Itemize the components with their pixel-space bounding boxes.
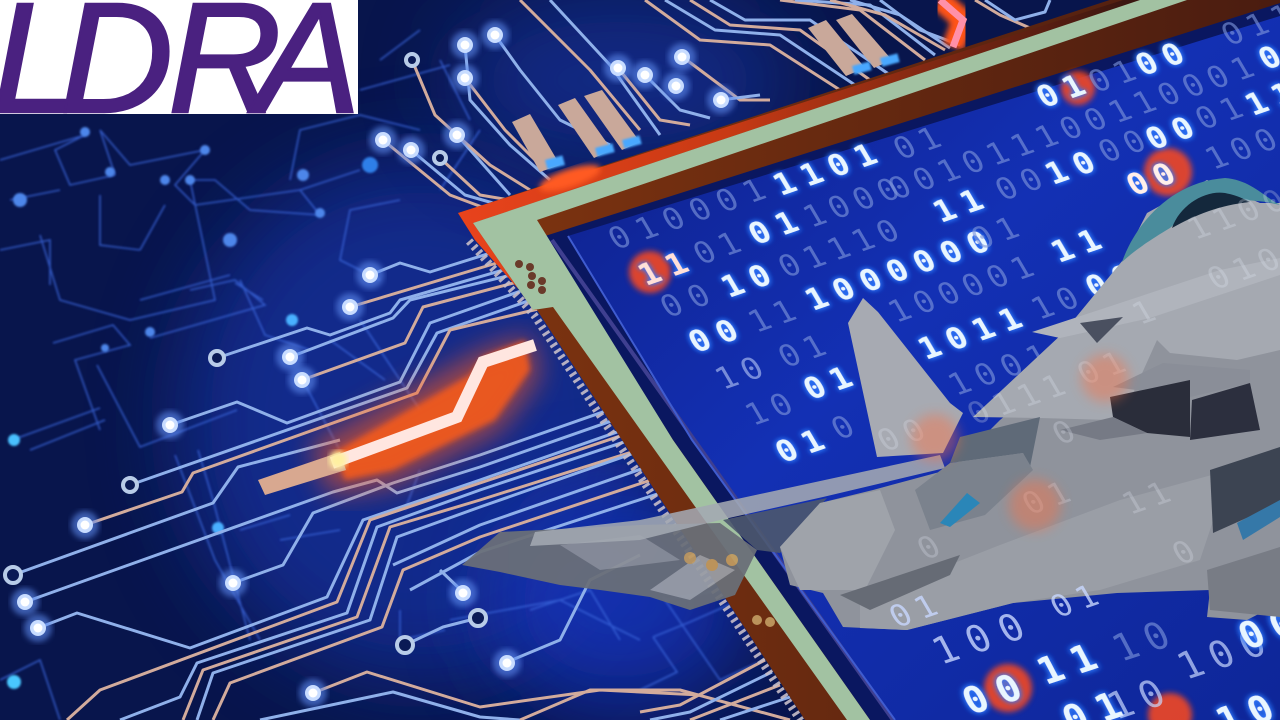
orange glow at top corner xyxy=(537,160,603,196)
binary digits: 10 xyxy=(1038,141,1111,192)
faint digits over aircraft: 01 xyxy=(1015,472,1084,522)
LDRA logo xyxy=(0,0,361,146)
corner pad dots xyxy=(515,260,546,294)
binary digits: 100 xyxy=(1170,618,1280,689)
right wing edge xyxy=(1032,258,1280,338)
binary digits: 0 xyxy=(824,406,867,447)
binary digits: 1001 xyxy=(941,334,1064,403)
binary digits: 1000 xyxy=(796,168,913,235)
faint digits over aircraft: 0 xyxy=(910,526,954,567)
schematic nodes xyxy=(7,127,378,689)
near wing xyxy=(530,455,945,546)
faint digits over aircraft xyxy=(870,180,1280,635)
binary digits: 11 xyxy=(631,242,704,293)
binary digits: 01 xyxy=(886,117,954,167)
schematic traces xyxy=(0,0,757,720)
red highlights on screen xyxy=(629,71,1192,720)
top red glowing trace xyxy=(940,0,963,47)
binary digits: 00 xyxy=(681,309,754,360)
binary digits: 1101 xyxy=(766,133,892,203)
chip screen xyxy=(568,16,1280,720)
binary digits: 100001 xyxy=(881,246,1047,330)
fighter jet xyxy=(462,178,1280,635)
wing store cluster xyxy=(462,523,775,627)
faint digits over aircraft: 0 xyxy=(1045,411,1089,452)
faint digits over aircraft: 01 xyxy=(1043,575,1112,625)
binary digits: 00 xyxy=(988,158,1056,208)
binary digits: 01 xyxy=(768,419,839,470)
main fuselage xyxy=(780,430,1280,630)
chip dark inner panel xyxy=(537,3,1280,720)
binary digits: 01 xyxy=(686,222,754,272)
binary digits: 01 xyxy=(1188,87,1256,137)
binary digits: 11 xyxy=(926,179,999,230)
canopy xyxy=(1122,178,1280,262)
binary digits: 01 xyxy=(771,325,839,375)
binary digits: 01 xyxy=(741,201,814,252)
faint digits over aircraft: 0111 xyxy=(960,365,1079,432)
binary digits: 010001 xyxy=(601,168,781,257)
binary digits: 10 xyxy=(708,347,777,397)
binary digits: 01 xyxy=(1029,64,1100,115)
binary digits: 01 xyxy=(1081,50,1149,100)
binary digits: 1011 xyxy=(911,297,1037,367)
upper fuselage and nose xyxy=(973,180,1280,420)
connector fingers xyxy=(512,14,892,172)
weapons and shaded underside xyxy=(915,417,1280,617)
glowing orange trace xyxy=(258,335,540,495)
binary digits: 00 xyxy=(1128,32,1199,83)
top trace bundle xyxy=(383,0,1050,210)
binary digits: 10 xyxy=(1024,277,1092,327)
chip top brown band xyxy=(533,0,1280,236)
engine intakes xyxy=(1060,363,1260,440)
binary digits: 00 xyxy=(1078,254,1149,305)
binary digits: 10 xyxy=(738,383,806,433)
binary digits: 00 xyxy=(653,274,726,325)
shaded wedge under wing xyxy=(723,498,827,553)
faint digits over aircraft: 01 xyxy=(1070,342,1139,392)
binary digits: 11 xyxy=(741,290,809,340)
faint digits over aircraft: 0 xyxy=(1165,531,1209,572)
trace end pads xyxy=(5,21,735,707)
binary digits: 10 xyxy=(714,254,787,305)
binary digits: 00 xyxy=(1119,152,1190,203)
chip brown base xyxy=(458,0,1280,720)
binary digits: 01 xyxy=(796,356,867,407)
faint digits over aircraft: 1 xyxy=(1125,291,1169,332)
fuselage backing xyxy=(950,300,1280,500)
binary digits xyxy=(601,0,1280,720)
faint digits over aircraft: 01 xyxy=(882,585,951,635)
chip pin dots xyxy=(469,241,802,720)
binary digits: 100 xyxy=(925,601,1044,674)
binary digits: 01110 xyxy=(771,210,912,285)
chip red edge xyxy=(458,0,1140,310)
binary digits: 001011100110001 xyxy=(881,47,1267,207)
binary digits: 1000000 xyxy=(798,220,1005,318)
binary digits: 11 xyxy=(1030,632,1116,694)
lower-left trace bundle xyxy=(13,250,790,720)
binary digits: 10 xyxy=(1105,610,1187,671)
faint digits over aircraft: 00 xyxy=(870,409,939,459)
microchip xyxy=(458,0,1280,720)
binary digits: 11 xyxy=(1044,219,1117,270)
orange glow spots on aircraft xyxy=(911,354,1129,531)
tail fin xyxy=(848,298,963,457)
binary digits: 00 xyxy=(1091,120,1159,170)
binary digits: 01 xyxy=(964,207,1032,257)
binary digits: 00 xyxy=(1138,106,1209,157)
faint digits over aircraft: 11 xyxy=(1115,472,1184,522)
chip green substrate xyxy=(473,0,1187,720)
